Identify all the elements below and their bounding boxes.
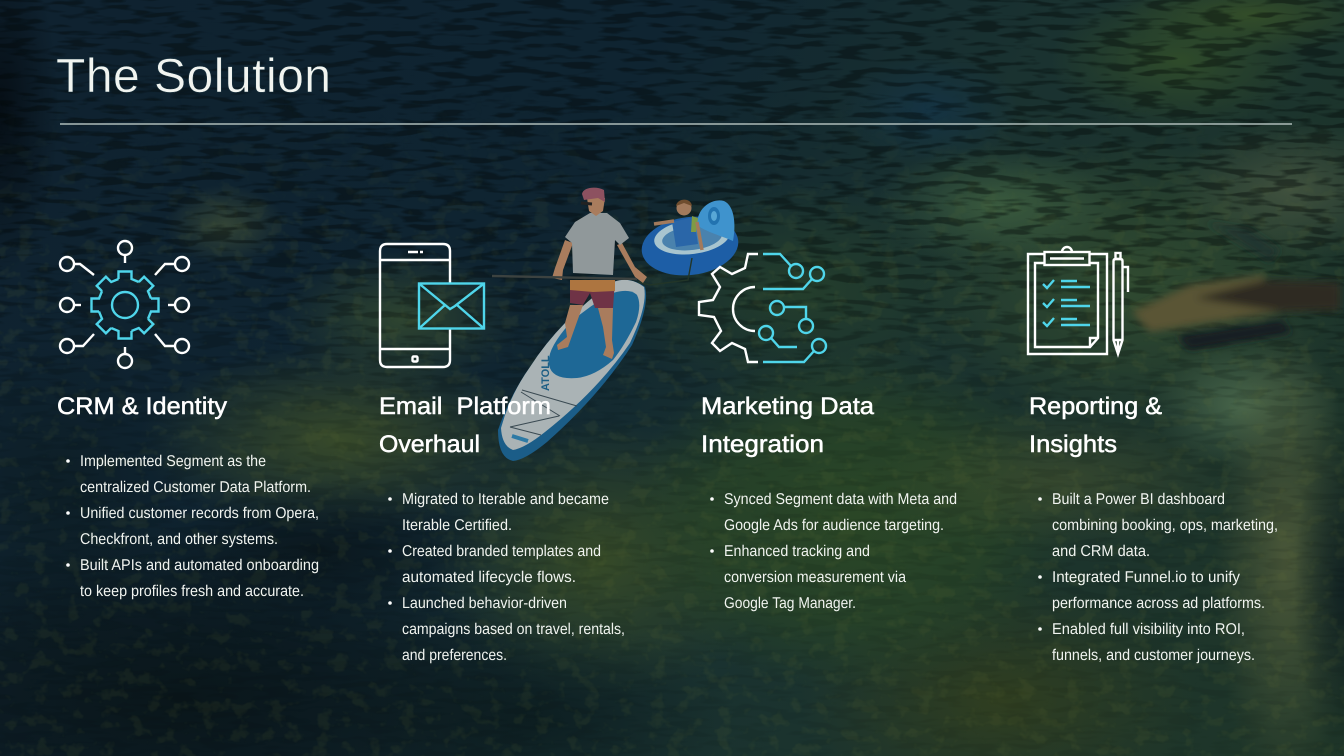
- bullet list: Google Tag Manager.: [724, 595, 856, 612]
- icon: phone with envelope: [380, 244, 484, 367]
- icon: half gear with circuit: [699, 254, 826, 362]
- paddleboard: [498, 280, 646, 461]
- paddle: [492, 276, 637, 279]
- bullet list: Enabled full visibility into ROI,: [1052, 621, 1245, 638]
- leash: [638, 258, 692, 285]
- icon: clipboard and pen: [1028, 247, 1128, 354]
- man: [552, 188, 647, 359]
- bullet list: Launched behavior-driven: [402, 595, 567, 612]
- bullet list: [1038, 491, 1278, 664]
- bullet list: [388, 491, 625, 664]
- bullet list: Checkfront, and other systems.: [80, 531, 278, 548]
- bullet list: [710, 491, 957, 612]
- heading: Marketing Data: [701, 393, 875, 420]
- bullet list: Created branded templates and: [402, 543, 601, 560]
- panel: Marketing Data Integration: [699, 254, 957, 612]
- panel: CRM & Identity: [57, 241, 319, 600]
- heading: Integration: [701, 431, 824, 458]
- bullet list: Integrated Funnel.io to unify: [1052, 569, 1240, 586]
- bullet list: Iterable Certified.: [402, 517, 512, 534]
- title rule: [60, 123, 1292, 125]
- bullet list: centralized Customer Data Platform.: [80, 479, 311, 496]
- bullet list: and CRM data.: [1052, 543, 1150, 560]
- panel: Reporting & Insights: [1028, 247, 1278, 664]
- bullet list: Unified customer records from Opera,: [80, 505, 319, 522]
- heading: Insights: [1029, 431, 1117, 458]
- bullet list: Migrated to Iterable and became: [402, 491, 609, 508]
- photo: paddleboarder and child in tube: [492, 188, 742, 461]
- bullet list: performance across ad platforms.: [1052, 595, 1265, 612]
- bullet list: conversion measurement via: [724, 569, 906, 586]
- bullet list: Enhanced tracking and: [724, 543, 870, 560]
- bullet list: Synced Segment data with Meta and: [724, 491, 957, 508]
- title: The Solution: [56, 50, 331, 103]
- icon: gear with network nodes: [60, 241, 189, 368]
- heading: Email Platform: [379, 393, 551, 420]
- bullet list: to keep profiles fresh and accurate.: [80, 583, 304, 600]
- heading: CRM & Identity: [57, 393, 227, 420]
- bullet list: [66, 453, 319, 600]
- bullet list: combining booking, ops, marketing,: [1052, 517, 1278, 534]
- bullet list: Implemented Segment as the: [80, 453, 266, 470]
- bullet list: campaigns based on travel, rentals,: [402, 621, 625, 638]
- panel: Email Platform Overhaul: [379, 244, 625, 664]
- bullet list: funnels, and customer journeys.: [1052, 647, 1255, 664]
- heading: Reporting &: [1029, 393, 1162, 420]
- bullet list: Built APIs and automated onboarding: [80, 557, 319, 574]
- bullet list: Google Ads for audience targeting.: [724, 517, 944, 534]
- heading: Overhaul: [379, 431, 480, 458]
- bullet list: and preferences.: [402, 647, 507, 664]
- inflatable tube: [638, 200, 742, 281]
- heading: [701, 393, 875, 458]
- board logo: ATOLL: [540, 355, 552, 391]
- bullet list: automated lifecycle flows.: [402, 569, 576, 586]
- bullet list: Built a Power BI dashboard: [1052, 491, 1225, 508]
- heading: [379, 393, 551, 458]
- underwater rock: [1132, 222, 1340, 350]
- heading: [1029, 393, 1162, 458]
